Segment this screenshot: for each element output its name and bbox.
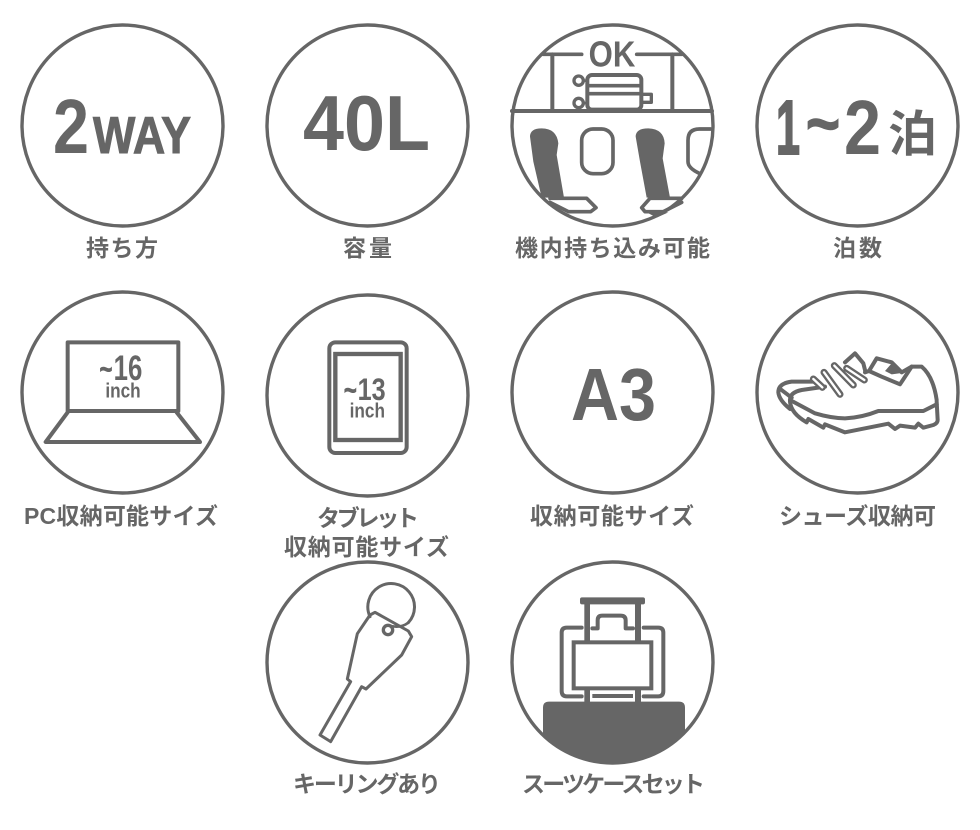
icon: laptop 16 inch: ~: [100, 354, 112, 384]
label: suitcase set: スーツケースセット: [522, 771, 705, 797]
panel: 40L capacity: [267, 25, 468, 261]
icon: laptop 16 inch: inch: [105, 381, 141, 403]
label: tablet compatible size: [284, 505, 449, 560]
icon: airplane cabin with suitcase: [512, 25, 713, 226]
label: cabin carry-on OK: 機内持ち込み可能: [515, 235, 710, 261]
panel: suitcase set: [512, 562, 713, 797]
icon: laptop 16 inch: 16: [114, 349, 142, 388]
icon: tablet 13 inch: inch: [350, 400, 385, 422]
circle badge: 1~2 nights: [757, 25, 958, 226]
circle badge: 40L: [267, 25, 468, 226]
label: tablet compatible size: 収納可能サイズ: [284, 534, 449, 560]
panel: cabin carry-on: [512, 25, 713, 261]
icon: tablet 13 inch: [267, 295, 468, 496]
panel: 1-2 nights: [757, 25, 958, 261]
icon: laptop 16 inch: [22, 292, 223, 493]
icon: key with ring: [267, 562, 468, 763]
label: tablet compatible size: タブレット: [317, 505, 419, 531]
icon: airplane cabin with suitcase: OK: [589, 34, 635, 75]
label: capacity: 容量: [343, 235, 392, 261]
label: PC compatible size: PC収納可能サイズ: [24, 503, 218, 529]
icon: bag on suitcase handle: [512, 562, 713, 763]
circle badge: 1~2 nights: 2: [844, 85, 881, 171]
panel: 2WAY carrying style: [22, 25, 223, 261]
label: number of nights: 泊数: [833, 235, 882, 261]
panel: A3 size: [512, 292, 713, 529]
label: shoes storable: シューズ収納可: [779, 503, 936, 529]
circle badge: 2WAY: 2: [53, 84, 89, 170]
circle badge: 40L: 40L: [303, 79, 430, 167]
panel: key ring: [267, 562, 468, 797]
circle badge: 1~2 nights: 1: [776, 85, 800, 171]
panel: shoes: [757, 292, 958, 529]
circle badge: 1~2 nights: 泊: [888, 108, 937, 162]
circle badge: 1~2 nights: ~: [806, 86, 840, 160]
label: carrying style: 持ち方: [86, 235, 158, 261]
icon: sneakers: [757, 292, 958, 493]
icon: tablet 13 inch: 13: [358, 371, 386, 407]
panel: tablet size: [267, 295, 468, 560]
circle badge: A3: A3: [571, 353, 656, 436]
circle badge: 2WAY: WAY: [93, 107, 191, 165]
circle badge: 2WAY: [22, 25, 223, 226]
circle badge: A3: [512, 292, 713, 493]
label: key ring included: キーリングあり: [293, 771, 441, 797]
label: A3 compatible: 収納可能サイズ: [530, 503, 694, 529]
panel: PC size: [22, 292, 223, 529]
icon: tablet 13 inch: ~: [344, 376, 357, 406]
